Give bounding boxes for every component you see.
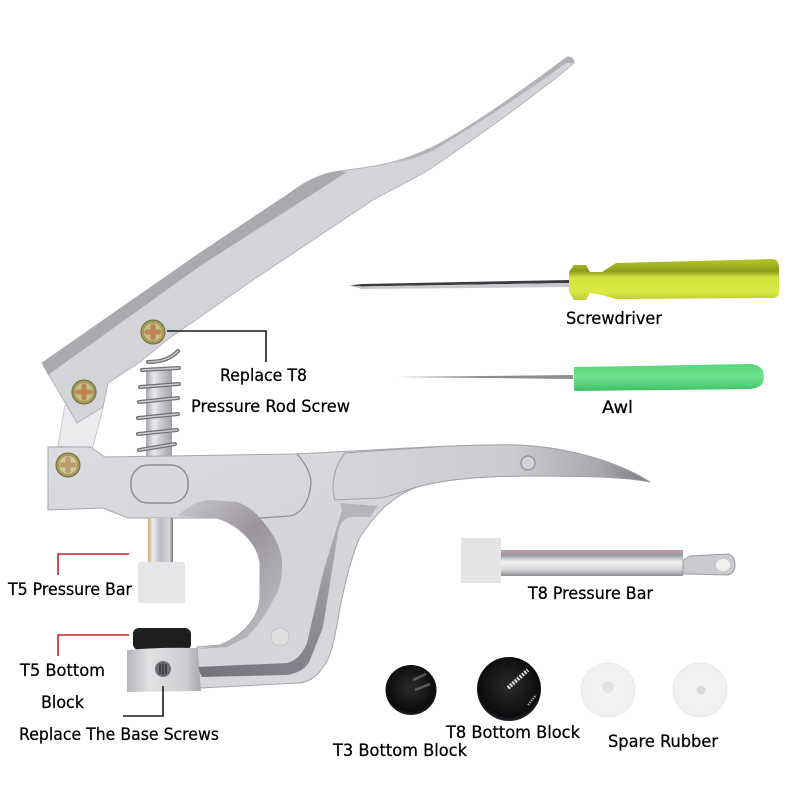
upper handle [42, 57, 574, 423]
handle top band [42, 171, 347, 375]
leader: T5 bottom block [58, 635, 129, 656]
label: awl: Awl [602, 398, 633, 418]
label: pressure rod screw: Pressure Rod Screw [191, 397, 350, 417]
screwdriver handle [569, 259, 779, 300]
awl needle [395, 375, 573, 379]
T5 bottom block [133, 628, 191, 650]
T8 eyelet [683, 554, 735, 575]
T3 bottom block disc [386, 665, 436, 715]
rivet mark [521, 456, 535, 470]
label: T8 bottom block: T8 Bottom Block [445, 723, 580, 743]
label: replace the base screws: Replace The Base Screws [19, 725, 219, 745]
T8 rod [501, 550, 683, 576]
beak [333, 445, 650, 500]
jaw plate outline [260, 454, 311, 518]
T5 pressure bar rod [148, 518, 173, 563]
spare rubber disc right [672, 662, 728, 718]
label: T5 pressure bar: T5 Pressure Bar [7, 580, 132, 600]
base screw [155, 661, 171, 677]
label: replace T8: Replace T8 [220, 366, 307, 386]
main body [48, 445, 650, 688]
base rivet mark [271, 628, 289, 646]
T5 pressure bar block [138, 562, 185, 603]
label: T5 bottom: T5 Bottom [19, 661, 105, 681]
label: spare rubber: Spare Rubber [608, 732, 718, 752]
screw: body pivot [56, 453, 80, 477]
base cylinder [127, 648, 201, 692]
oval slot [131, 465, 188, 503]
T8 white block [461, 538, 501, 583]
awl [395, 364, 764, 391]
label: T3 bottom block: T3 Bottom Block [332, 741, 467, 761]
screwdriver shaft [349, 280, 569, 286]
leader: replace the base screws [123, 686, 163, 716]
leader: replace T8 pressure rod screw [167, 331, 266, 362]
spring and inner rod [138, 351, 179, 456]
handle tip band [393, 57, 574, 163]
awl handle [574, 364, 764, 391]
label: block: Block [41, 693, 84, 713]
label: T8 pressure bar: T8 Pressure Bar [527, 584, 653, 604]
leader: T5 pressure bar [58, 554, 129, 575]
rear link [58, 405, 103, 450]
T8 eyelet hole [716, 559, 730, 571]
screw: handle pivot [72, 380, 96, 404]
inner curve shading [177, 500, 282, 649]
groove shading [197, 503, 378, 677]
T8 pressure bar [461, 538, 735, 583]
label: screwdriver: Screwdriver [566, 309, 662, 329]
T8 bottom block disc [477, 657, 541, 721]
screw: upper [141, 320, 165, 344]
screwdriver [349, 259, 779, 300]
spare rubber disc left [580, 662, 636, 718]
pliers tool [42, 57, 650, 692]
